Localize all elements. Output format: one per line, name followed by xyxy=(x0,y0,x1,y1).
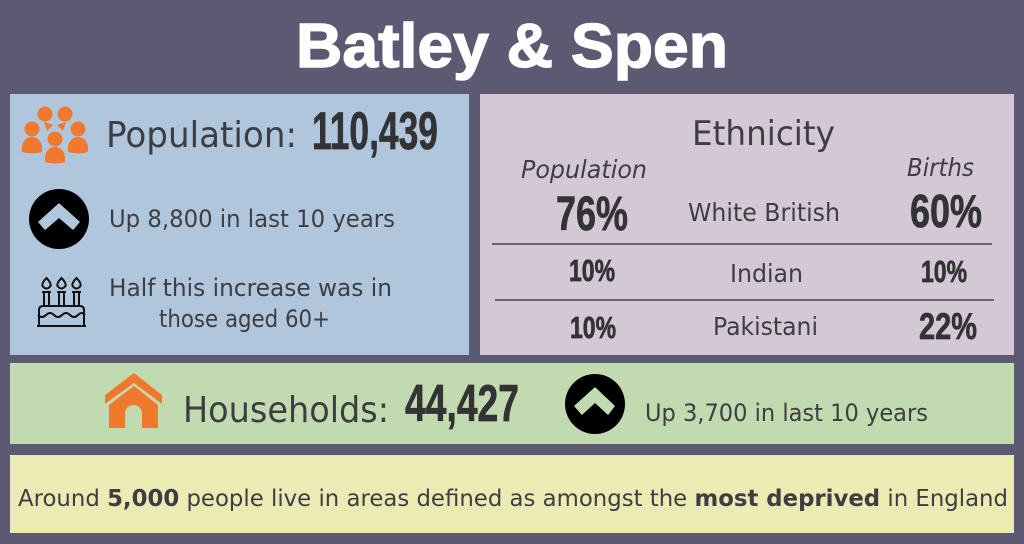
icon: up arrow xyxy=(29,189,89,249)
population column heading: Population xyxy=(521,155,647,184)
increase note xyxy=(109,274,392,333)
births column heading: Births xyxy=(907,153,974,182)
households label: Households: xyxy=(183,390,389,431)
pakistani row xyxy=(570,306,977,347)
deprivation text: Around 5,000 people live in areas defined as amongst the most deprived in England xyxy=(18,484,1008,512)
white british row: White British xyxy=(688,198,840,227)
indian row: Indian xyxy=(730,259,803,288)
panel: deprivation xyxy=(10,455,1014,533)
ethnicity heading: Ethnicity xyxy=(692,114,835,154)
pakistani row: Pakistani xyxy=(713,312,818,341)
indian row xyxy=(569,253,967,289)
icon: house xyxy=(105,373,162,428)
households change text: Up 3,700 in last 10 years xyxy=(645,399,928,427)
indian row: 10% xyxy=(921,254,967,289)
panel: households xyxy=(10,363,1014,444)
icon: birthday cake xyxy=(37,278,86,326)
increase note: those aged 60+ xyxy=(159,305,330,333)
white british row xyxy=(556,185,982,241)
panel: population xyxy=(10,94,469,355)
population label: Population: xyxy=(106,115,297,156)
panel: ethnicity xyxy=(480,94,1014,355)
icon: people group xyxy=(22,106,88,164)
population change text: Up 8,800 in last 10 years xyxy=(109,205,395,233)
icon: up arrow xyxy=(565,374,625,434)
population number: 110,439 xyxy=(312,102,438,161)
households number: 44,427 xyxy=(405,375,519,433)
increase note: Half this increase was in xyxy=(109,274,392,302)
indian row: 10% xyxy=(569,253,615,288)
white british row: 76% xyxy=(556,188,628,241)
white british row: 60% xyxy=(910,185,982,237)
pakistani row: 22% xyxy=(919,306,977,347)
pakistani row: 10% xyxy=(570,310,616,345)
title: Batley & Spen xyxy=(296,12,728,81)
